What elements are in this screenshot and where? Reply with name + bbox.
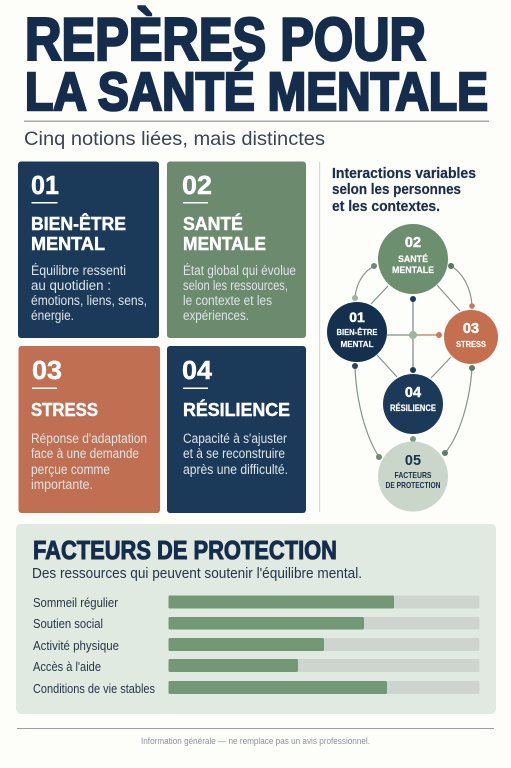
heading: interactions xyxy=(332,166,476,215)
node 01 bien-être mental: 01 xyxy=(349,309,365,325)
network diagram xyxy=(327,224,498,512)
title xyxy=(25,6,488,122)
panel: card 02 santé mentale: SANTÉ xyxy=(183,213,243,234)
node 03 stress xyxy=(444,310,498,364)
panel heading: FACTEURS DE PROTECTION xyxy=(33,535,337,565)
subtitle: Cinq notions liées, mais distinctes xyxy=(24,128,325,150)
panel: card 03 stress: STRESS xyxy=(31,400,98,420)
node 04 résilience: RÉSILIENCE xyxy=(390,403,436,413)
bar: accès à l'aide xyxy=(33,659,480,674)
bar: soutien social: Soutien social xyxy=(33,616,103,631)
panel: card 01 bien-être mental: 01 xyxy=(31,170,59,200)
panel: card 04 résilience: RÉSILIENCE xyxy=(183,399,290,420)
bar: conditions de vie stables xyxy=(33,681,480,696)
node 04 résilience xyxy=(383,374,443,434)
panel: card 02 santé mentale: selon les ressources, xyxy=(183,278,288,293)
connecting lines xyxy=(355,266,472,457)
bar chart xyxy=(33,595,480,696)
node 02 santé mentale: SANTÉ xyxy=(398,254,428,265)
node 01 bien-être mental: MENTAL xyxy=(340,339,374,349)
panel: card 02 santé mentale: État global qui évolue xyxy=(183,263,296,278)
panel: card 04 résilience: et à se reconstruire xyxy=(183,446,285,461)
panel: card 04 résilience: Capacité à s'ajuster xyxy=(183,431,287,446)
title: REPÈRES POUR xyxy=(25,6,426,73)
node 05 facteurs de protection xyxy=(378,442,448,512)
node 02 santé mentale: MENTALE xyxy=(392,265,434,276)
node 02 santé mentale: 02 xyxy=(405,235,421,251)
panel: card 02 santé mentale: MENTALE xyxy=(183,234,266,254)
bar: accès à l'aide: Accès à l'aide xyxy=(33,659,101,674)
panel: card 03 stress: Réponse d'adaptation xyxy=(31,431,147,446)
bar: activité physique: Activité physique xyxy=(33,638,119,653)
panel: card 01 bien-être mental: MENTAL xyxy=(31,234,105,254)
panel: card 01 bien-être mental: Équilibre ressenti xyxy=(31,263,126,278)
panel: card 02 santé mentale: le contexte et les xyxy=(183,293,272,308)
node 02 santé mentale xyxy=(378,224,448,294)
panel: card 01 bien-être mental xyxy=(18,162,159,338)
bar: sommeil régulier xyxy=(33,595,480,610)
panel: card 04 résilience: 04 xyxy=(182,355,213,385)
bar: sommeil régulier: Sommeil régulier xyxy=(33,595,119,610)
panel: card 03 stress xyxy=(18,346,160,513)
panel: card 02 santé mentale xyxy=(167,162,306,338)
connector dots xyxy=(352,263,475,460)
panel: card 01 bien-être mental: émotions, liens, sens, xyxy=(31,293,147,308)
node 03 stress: 03 xyxy=(463,321,479,337)
node 05 facteurs de protection: 05 xyxy=(405,453,421,469)
panel: card 02 santé mentale: 02 xyxy=(182,170,212,200)
panel: card 02 santé mentale: expériences. xyxy=(183,308,249,323)
panel: card 03 stress: face à une demande xyxy=(31,446,139,461)
panel: card 03 stress: 03 xyxy=(32,355,62,385)
heading: interactions: selon les personnes xyxy=(332,182,461,198)
panel: card 01 bien-être mental: BIEN-ÊTRE xyxy=(31,213,126,234)
node 03 stress: STRESS xyxy=(456,339,486,349)
panel: card 04 résilience: après une difficulté. xyxy=(183,462,288,477)
bar: activité physique xyxy=(33,638,480,653)
panel subtitle: Des ressources qui peuvent soutenir l'équilibre mental. xyxy=(32,566,362,582)
footer note: Information générale — ne remplace pas un avis professionnel. xyxy=(141,736,370,746)
panel: card 04 résilience xyxy=(167,346,306,513)
bar: conditions de vie stables: Conditions de vie stables xyxy=(33,681,155,696)
node 01 bien-être mental xyxy=(327,302,387,362)
node 04 résilience: 04 xyxy=(405,385,421,401)
panel: card 01 bien-être mental: au quotidien : xyxy=(31,278,111,293)
panel: facteurs de protection xyxy=(16,524,496,714)
node 05 facteurs de protection: DE PROTECTION xyxy=(386,480,440,490)
heading: interactions: et les contextes. xyxy=(332,199,440,215)
node 05 facteurs de protection: FACTEURS xyxy=(394,470,432,480)
heading: interactions: Interactions variables xyxy=(332,166,476,182)
panel: card 01 bien-être mental: énergie. xyxy=(31,308,74,323)
panel: card 03 stress: importante. xyxy=(31,477,93,492)
node 01 bien-être mental: BIEN-ÊTRE xyxy=(336,326,378,337)
bar: soutien social xyxy=(33,616,480,631)
panel: card 03 stress: perçue comme xyxy=(31,462,110,477)
